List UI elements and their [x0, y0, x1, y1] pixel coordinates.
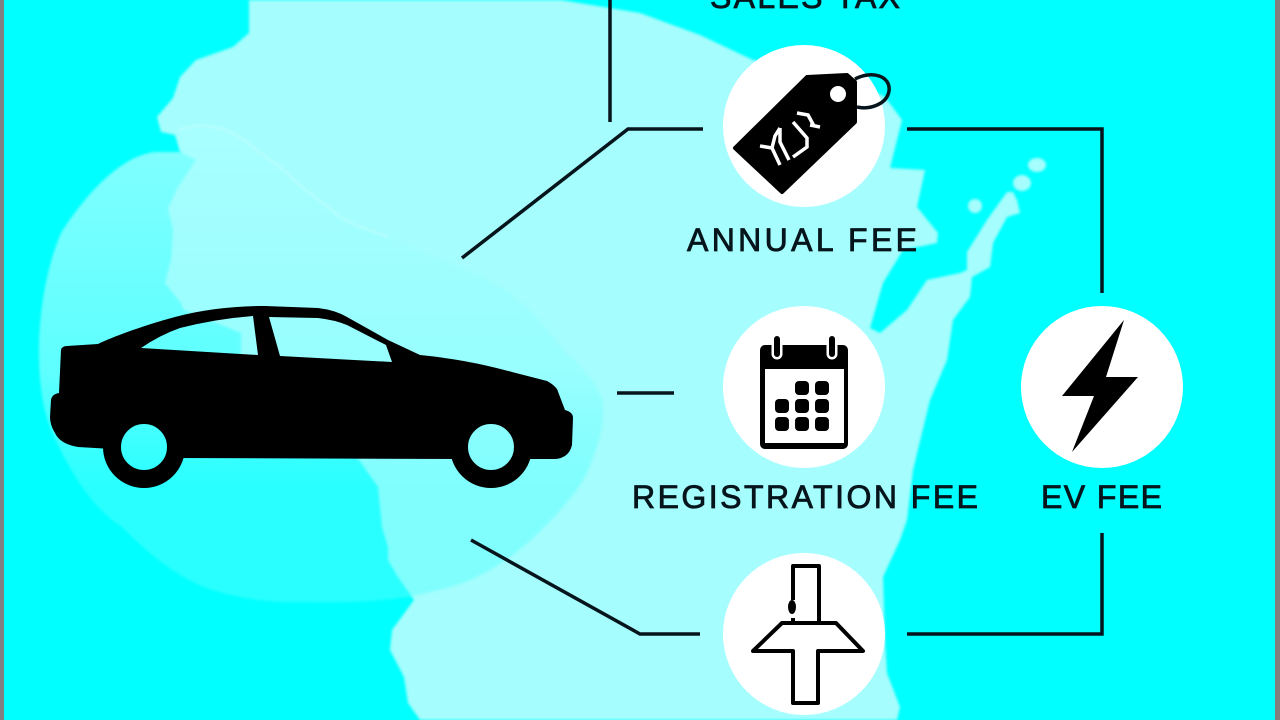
icon: road sign outline — [753, 566, 863, 703]
icon: calendar — [760, 339, 848, 449]
icon: lightning bolt — [1062, 320, 1138, 452]
ev fee node — [1021, 306, 1183, 468]
connector lines — [462, 0, 1102, 634]
map of Wisconsin — [157, 0, 1046, 720]
bottom node — [723, 553, 885, 715]
registration fee node — [723, 306, 885, 468]
icon: car — [50, 306, 573, 479]
label: registration fee: REGISTRATION FEE — [632, 479, 978, 515]
annual fee node — [723, 45, 889, 207]
icon: price tag — [735, 75, 889, 192]
label: ev fee: EV FEE — [1041, 479, 1162, 515]
label: annual fee: ANNUAL FEE — [687, 222, 917, 258]
translucent bubble — [39, 125, 603, 602]
